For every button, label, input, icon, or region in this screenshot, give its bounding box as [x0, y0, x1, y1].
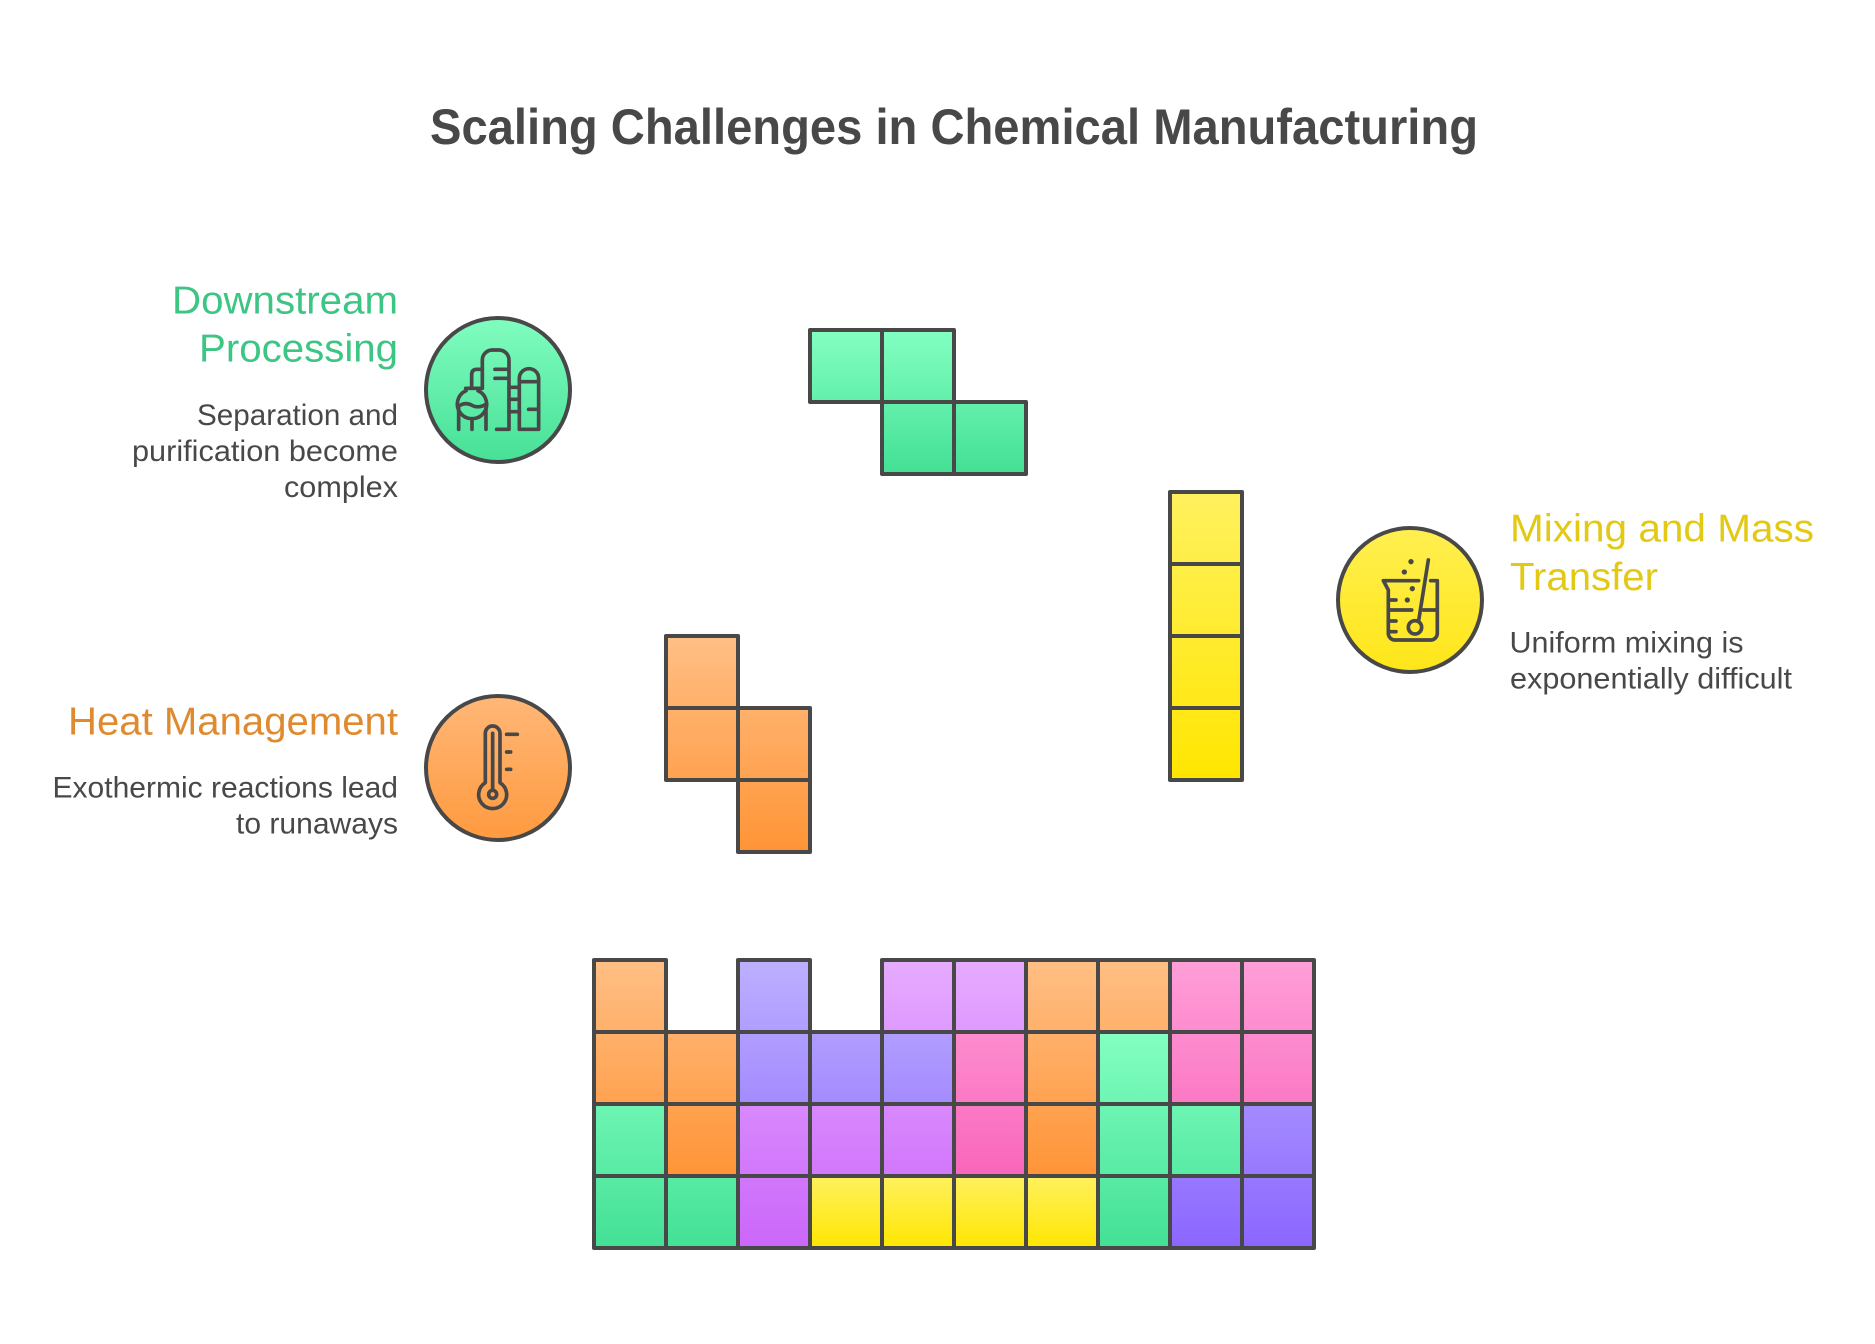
- icon: beaker: [1338, 528, 1482, 672]
- heading: mixing and mass transfer: Transfer: [1510, 556, 1658, 599]
- text: mixing description: [1510, 627, 1793, 696]
- panel: downstream processing: [132, 280, 570, 504]
- orange block piece: [666, 636, 810, 852]
- text: heat description: Exothermic reactions lead: [52, 772, 398, 804]
- text: heat description: [52, 772, 398, 840]
- title: Scaling Challenges in Chemical Manufacturing: [430, 99, 1478, 155]
- heading: downstream processing: [172, 280, 398, 370]
- icon: chemical plant: [426, 318, 570, 462]
- green block piece: [810, 330, 1026, 474]
- text: downstream description: [132, 399, 398, 504]
- panel: heat management: [52, 696, 570, 840]
- text: heat description: to runaways: [236, 808, 398, 840]
- text: downstream description: Separation and: [197, 399, 398, 432]
- heading: downstream processing: Downstream: [172, 280, 398, 322]
- heading: heat management: Heat Management: [68, 700, 398, 744]
- heading: mixing and mass transfer: Mixing and Mass: [1510, 508, 1814, 551]
- text: mixing description: Uniform mixing is: [1510, 627, 1744, 660]
- icon: thermometer: [426, 696, 570, 840]
- text: downstream description: purification become: [132, 435, 398, 468]
- heading: downstream processing: Processing: [199, 328, 398, 370]
- text: mixing description: exponentially difficult: [1510, 663, 1793, 696]
- heading: mixing and mass transfer: [1510, 508, 1814, 599]
- text: downstream description: complex: [284, 471, 398, 504]
- yellow block piece: [1170, 492, 1242, 780]
- panel: mixing and mass transfer: [1338, 508, 1814, 696]
- stacked block grid: [594, 960, 1314, 1248]
